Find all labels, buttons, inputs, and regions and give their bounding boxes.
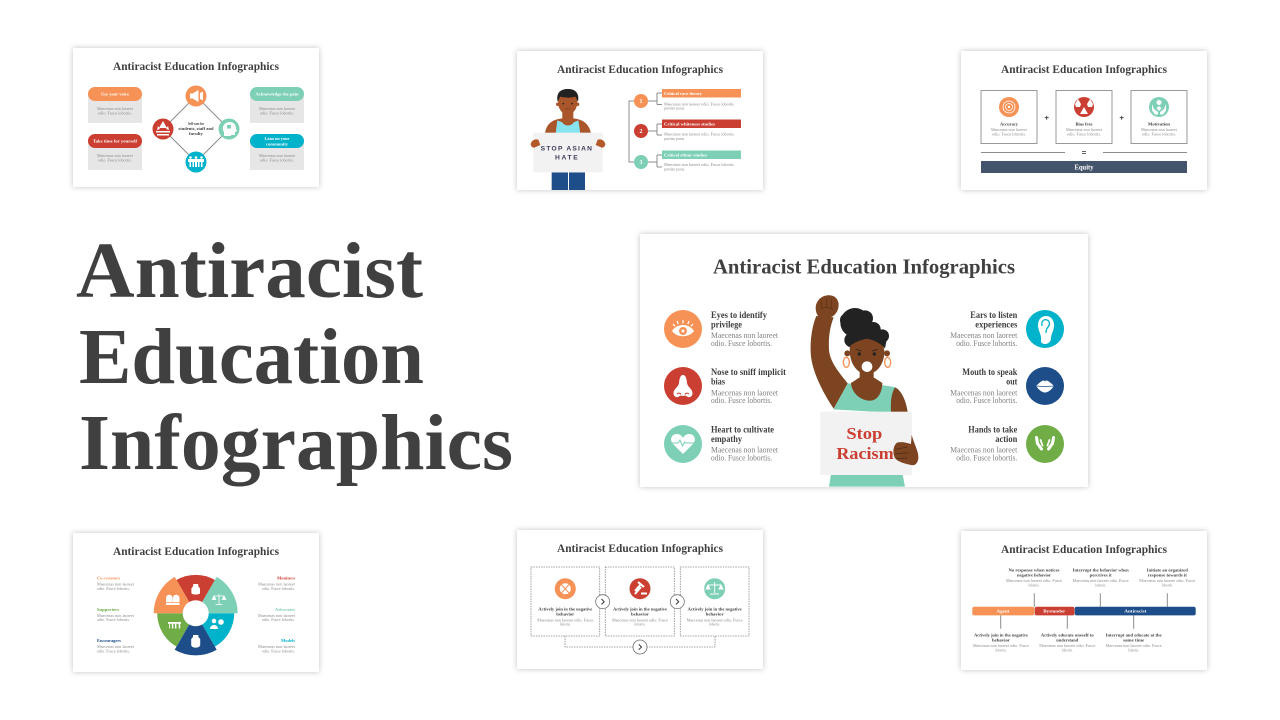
item: mouth: out — [1006, 376, 1018, 386]
box: bias free: Bias free — [1076, 121, 1093, 126]
right label: monitors — [258, 575, 295, 591]
note: interrupt and educate: Interrupt and educate at the — [1106, 632, 1162, 637]
card: lean on your community: community — [266, 142, 289, 146]
panel: pie wheel slide — [73, 533, 319, 672]
box: bias free — [1056, 90, 1112, 144]
note: actively educate: Actively educate oneself to — [1041, 632, 1094, 637]
item: heart: Maecenas non laoreet — [711, 445, 778, 455]
note: interrupt and educate: lobortis. — [1128, 648, 1139, 652]
item: eyes: Eyes to identify — [711, 310, 767, 320]
diamond connector — [163, 96, 229, 162]
item: eyes: privilege — [711, 319, 742, 329]
item: hands: odio. Fusce lobortis. — [956, 452, 1017, 462]
icon: paired faces — [166, 595, 180, 605]
card: lean on your community: odio. Fusce lobortis. — [260, 158, 294, 162]
step 1: critical race theory: porttitor purus. — [664, 107, 685, 111]
timeline bar: antiracist — [1075, 607, 1196, 615]
step 2: critical whiteness studies: Maecenas non laoreet odio. Fusce lobortis — [664, 133, 735, 137]
item: eyes: Maecenas non laoreet — [711, 330, 778, 340]
box: motivation: Motivation — [1148, 121, 1171, 126]
item: eyes — [664, 310, 778, 348]
arrow button 1 — [596, 595, 610, 609]
plus sign 1 — [1045, 116, 1049, 120]
step box 2 — [605, 567, 674, 636]
step box 2: Actively join in the negative — [613, 607, 667, 612]
icon: scales — [212, 594, 226, 604]
icon: shield hand — [191, 635, 200, 648]
item: nose: Nose to sniff implicit — [711, 367, 787, 377]
main title: Education — [79, 314, 424, 401]
timeline tick lines — [1001, 593, 1167, 629]
step box 1: Actively join in the negative — [538, 607, 592, 612]
item: hands: action — [995, 434, 1017, 444]
left label: encouragers: Maecenas non laoreet — [97, 645, 134, 649]
step box 3 — [680, 567, 749, 636]
card: take time for yourself: Maecenas non laoreet — [97, 154, 133, 158]
slide title: Antiracist Education Infographics — [713, 254, 1015, 278]
item: ears: Ears to listen — [970, 310, 1017, 320]
box: accuracy: Accuracy — [1000, 121, 1019, 126]
right label: advocates: Advocates — [275, 607, 295, 612]
item: hands: Hands to take — [968, 424, 1017, 434]
panel: equity equation slide — [961, 51, 1207, 190]
illustration: woman with raised fist and sign: Racism — [836, 444, 894, 463]
slide title: Antiracist Education Infographics — [1001, 544, 1168, 556]
step 2: critical whiteness studies: porttitor purus. — [664, 137, 685, 141]
item: hands: Maecenas non laoreet — [950, 445, 1018, 455]
item: mouth: odio. Fusce lobortis. — [956, 395, 1017, 405]
panel: featured stop racism slide — [640, 234, 1088, 487]
step 2: critical whiteness studies: Critical whiteness studies — [664, 121, 715, 126]
note: no response — [1006, 567, 1062, 587]
step box 1: lobortis. — [560, 622, 571, 626]
panel: stop asian hate slide — [517, 51, 763, 190]
panel: self-care diamond slide — [73, 48, 319, 187]
icon: monitor figure — [191, 584, 200, 594]
note: initiate response: Maecenas non laoreet odio. Fusce — [1139, 579, 1196, 583]
timeline bar: agent — [972, 607, 1034, 615]
box: motivation — [1131, 90, 1187, 144]
note: interrupt and educate — [1106, 632, 1162, 652]
step 2: critical whiteness studies — [634, 120, 741, 141]
box: accuracy: odio. Fusce lobortis. — [992, 132, 1026, 136]
step box 3: behavior — [706, 611, 724, 616]
main title: Antiracist — [76, 228, 423, 315]
item: heart — [664, 424, 778, 463]
note: initiate response: lobortis. — [1162, 583, 1173, 587]
timeline bar: bystander — [1035, 607, 1074, 615]
right label: advocates: Maecenas non laoreet — [258, 614, 295, 618]
step 1: critical race theory: Critical race theory — [664, 91, 703, 96]
item: ears: odio. Fusce lobortis. — [956, 338, 1017, 348]
left label: encouragers: Encouragers — [97, 638, 121, 643]
card: acknowledge the pain: odio. Fusce lobortis. — [260, 112, 294, 116]
card: take time for yourself — [88, 134, 142, 170]
step box 2: lobortis. — [634, 622, 646, 626]
item: nose: Maecenas non laoreet — [711, 387, 778, 397]
icon: eye — [664, 310, 702, 348]
card: use your voice — [88, 87, 142, 123]
note: interrupt the behavior: perceives it — [1090, 572, 1112, 577]
note: no response: negative behavior — [1017, 572, 1051, 577]
right label: advocates — [258, 607, 295, 622]
item: hands — [950, 424, 1064, 463]
note: actively educate — [1039, 632, 1096, 652]
diamond centre text: students, staff and — [178, 126, 214, 131]
illustration: man holding sign: HATE — [555, 155, 578, 162]
item: eyes: odio. Fusce lobortis. — [711, 338, 772, 348]
step 1: critical race theory: Maecenas non laoreet odio. Fusce lobortis — [664, 102, 735, 106]
card: acknowledge the pain — [250, 87, 304, 123]
icon: lips — [1026, 367, 1064, 405]
note: actively join: Maecenas non laoreet odio. Fusce — [973, 644, 1029, 648]
note: actively join — [973, 632, 1029, 652]
card: use your voice: Maecenas non laoreet — [97, 107, 133, 111]
item: ears: Maecenas non laoreet — [950, 330, 1018, 340]
note: actively join: lobortis. — [996, 648, 1007, 652]
left label: co-creators: Maecenas non laoreet — [97, 582, 134, 586]
step 3: critical ethnic studies — [634, 150, 741, 172]
box: motivation: odio. Fusce lobortis. — [1142, 132, 1176, 136]
slide title: Antiracist Education Infographics — [1001, 64, 1168, 76]
right label: monitors: odio. Fusce lobortis. — [262, 587, 295, 591]
diamond centre text: Self-care for — [188, 121, 204, 126]
card: acknowledge the pain: Acknowledge the pain — [256, 92, 299, 96]
step 1: critical race theory — [634, 89, 741, 111]
equity bar — [981, 161, 1187, 173]
slide title: Antiracist Education Infographics — [113, 61, 280, 73]
right label: models — [258, 638, 295, 654]
step box 1 — [531, 567, 600, 636]
note: initiate response: Initiate an organized — [1147, 567, 1189, 572]
step box 1: Maecenas non laoreet odio. Fusce — [537, 618, 594, 622]
arrow button 2 — [670, 595, 684, 609]
card: lean on your community: Lean on your — [264, 136, 290, 141]
equals divider — [981, 152, 1187, 154]
chart: six-segment wheel — [154, 575, 238, 655]
box: accuracy — [981, 90, 1037, 144]
card: acknowledge the pain: Maecenas non laoreet — [259, 107, 295, 111]
slide title: Antiracist Education Infographics — [557, 64, 724, 76]
left label: co-creators: odio. Fusce lobortis. — [97, 587, 130, 591]
note: interrupt the behavior: lobortis. — [1095, 583, 1106, 587]
timeline bar: agent: Agent — [996, 609, 1010, 614]
left label: supporters: Supporters — [97, 607, 119, 612]
icon: megaphone — [186, 86, 206, 106]
box: motivation: Maecenas non laoreet — [1141, 128, 1177, 132]
step box 3: lobortis. — [709, 622, 720, 626]
left label: encouragers — [97, 638, 134, 654]
illustration: woman with raised fist and sign: Stop — [846, 424, 882, 443]
main title: Infographics — [79, 400, 513, 487]
right label: advocates: odio. Fusce lobortis. — [262, 618, 295, 622]
icon: ear — [1026, 310, 1064, 348]
left label: encouragers: odio. Fusce lobortis. — [97, 650, 130, 654]
box: bias free: odio. Fusce lobortis. — [1067, 132, 1101, 136]
item: mouth — [950, 367, 1064, 405]
item: mouth: Maecenas non laoreet — [950, 387, 1018, 397]
step 3: critical ethnic studies: Maecenas non laoreet odio. Fusce lobortis — [664, 163, 735, 167]
note: actively join: behavior — [992, 637, 1010, 642]
icon: people — [186, 152, 206, 172]
card: take time for yourself: Take time for yourself — [93, 138, 138, 144]
slide title: Antiracist Education Infographics — [557, 543, 724, 555]
step 3: critical ethnic studies: 3 — [640, 160, 642, 166]
left label: co-creators: Co-creators — [97, 575, 120, 580]
plus sign 2 — [1120, 116, 1124, 120]
card: use your voice: odio. Fusce lobortis. — [98, 112, 132, 116]
icon: mentor gear — [210, 619, 224, 629]
card: lean on your community — [250, 134, 304, 170]
icon: group — [168, 622, 181, 628]
step 2: critical whiteness studies: 2 — [640, 129, 642, 135]
step box 3: Actively join in the negative — [688, 607, 742, 612]
step box 3: Maecenas non laoreet odio. Fusce — [687, 618, 743, 622]
note: actively educate: lobortis. — [1062, 648, 1073, 652]
note: no response: No response when notices — [1008, 567, 1060, 572]
step 1: critical race theory: 1 — [640, 99, 642, 105]
timeline bar: bystander: Bystander — [1043, 609, 1065, 614]
box: bias free: Maecenas non laoreet — [1066, 128, 1102, 132]
item: nose: bias — [711, 376, 725, 386]
left label: supporters: Maecenas non laoreet — [97, 614, 134, 618]
equity bar: Equity — [1074, 163, 1094, 171]
item: ears: experiences — [975, 319, 1018, 329]
note: no response: lobortis. — [1028, 583, 1040, 587]
note: initiate response: response towards it — [1148, 572, 1187, 577]
note: interrupt the behavior: Maecenas non laoreet odio. Fusce — [1073, 579, 1129, 583]
main title — [76, 228, 513, 487]
card: take time for yourself: odio. Fusce lobortis. — [98, 158, 132, 162]
step box 2: Maecenas non laoreet odio. Fusce — [612, 618, 668, 622]
left label: supporters: odio. Fusce lobortis. — [97, 618, 130, 622]
icon: person with alert — [152, 118, 174, 140]
item: nose: odio. Fusce lobortis. — [711, 395, 772, 405]
right label: monitors: Monitors — [277, 575, 295, 580]
step 3: critical ethnic studies: porttitor purus. — [664, 168, 685, 172]
item: nose — [664, 367, 787, 405]
step box 2: behavior — [631, 611, 649, 616]
icon: hands — [1026, 425, 1064, 463]
diamond centre text: faculty — [189, 131, 204, 136]
note: actively educate: Maecenas non laoreet odio. Fusce — [1039, 644, 1096, 648]
slide title: Antiracist Education Infographics — [113, 546, 280, 558]
left label: co-creators — [97, 575, 134, 591]
dashed return connector — [565, 636, 715, 647]
arrow button 3 — [633, 640, 647, 654]
timeline bar: antiracist: Antiracist — [1124, 609, 1147, 614]
note: actively educate: understand — [1056, 637, 1079, 642]
illustration: woman with raised fist and sign — [811, 295, 918, 487]
note: interrupt and educate: Maecenas non laoreet odio. Fusce — [1106, 644, 1162, 648]
right label: models: odio. Fusce lobortis. — [262, 650, 295, 654]
step 3: critical ethnic studies: Critical ethnic studies — [664, 152, 707, 157]
right label: models: Maecenas non laoreet — [258, 645, 295, 649]
illustration: man holding sign: STOP ASIAN — [541, 146, 592, 153]
right label: models: Models — [281, 638, 295, 643]
illustration: man holding sign — [531, 89, 605, 190]
step box 1: behavior — [556, 611, 574, 616]
item: mouth: Mouth to speak — [962, 367, 1018, 377]
right label: monitors: Maecenas non laoreet — [258, 582, 295, 586]
note: interrupt and educate: same time — [1123, 637, 1144, 642]
box: accuracy: Maecenas non laoreet — [991, 128, 1027, 132]
item: heart: empathy — [711, 434, 742, 444]
numbered list connector — [629, 93, 662, 167]
diamond centre text — [178, 121, 214, 136]
note: actively join: Actively join in the negative — [974, 632, 1028, 637]
icon: heart — [664, 425, 702, 463]
note: interrupt the behavior — [1073, 567, 1129, 587]
icon: head — [218, 118, 240, 140]
item: ears — [950, 310, 1064, 348]
icon: nose — [664, 367, 702, 405]
panel: process steps slide — [517, 530, 763, 669]
card: use your voice: Use your voice — [101, 92, 129, 96]
left label: supporters — [97, 607, 134, 622]
note: no response: Maecenas non laoreet odio. Fusce — [1006, 579, 1062, 583]
panel: agent bystander antiracist timeline slide — [961, 531, 1207, 670]
item: heart: odio. Fusce lobortis. — [711, 452, 772, 462]
card: lean on your community: Maecenas non laoreet — [259, 154, 295, 158]
note: initiate response — [1139, 567, 1196, 587]
note: interrupt the behavior: Interrupt the behavior when — [1073, 567, 1129, 572]
item: heart: Heart to cultivate — [711, 424, 774, 434]
